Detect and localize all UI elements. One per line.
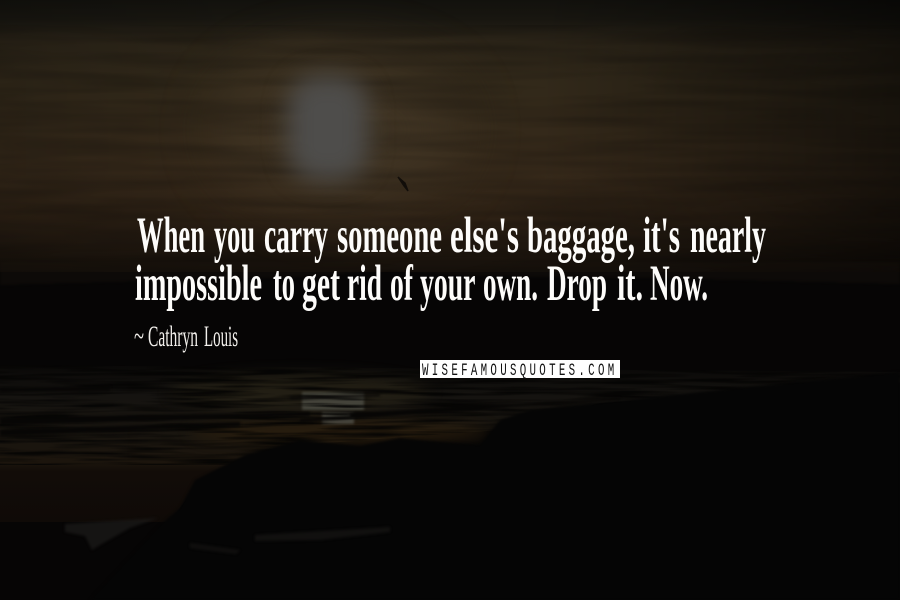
- quote line 1: When: [137, 208, 205, 264]
- quote line 1: nearly: [690, 208, 766, 264]
- silhouette: dark headland: [90, 372, 900, 600]
- quote line 2: get: [302, 256, 340, 312]
- quote text: [135, 208, 766, 312]
- quote line 2: rid: [347, 256, 382, 312]
- quote line 2: impossible: [135, 256, 262, 312]
- quote line 2: Drop: [547, 256, 607, 312]
- shoreline grey patches: [65, 518, 390, 554]
- sun glow: [288, 76, 368, 180]
- quote line 1: you: [214, 208, 255, 264]
- quote line 2: Now.: [650, 256, 708, 312]
- water ripples: [0, 370, 782, 465]
- author attribution: Cathryn: [148, 320, 198, 353]
- quote line 1: carry: [264, 208, 328, 264]
- quote line 2: your: [420, 256, 475, 312]
- quote line 2: to: [273, 256, 295, 312]
- background: sunset sky: [0, 0, 900, 280]
- sun reflection on water: [302, 392, 364, 424]
- quote line 2: own.: [483, 256, 538, 312]
- text: Louis: [204, 320, 238, 353]
- icon: bird silhouette: [398, 177, 408, 191]
- quote line 1: baggage,: [527, 208, 635, 264]
- quote line 2: it.: [617, 256, 643, 312]
- author attribution: ~: [134, 320, 144, 353]
- background: dark horizon and water: [0, 262, 900, 600]
- watermark logo: WISEFAMOUSQUOTES.COM: [422, 362, 617, 381]
- quote line 2: of: [390, 256, 414, 312]
- quote line 1: someone: [337, 208, 442, 264]
- quote line 1: it's: [643, 208, 680, 264]
- quote line 1: else's: [450, 208, 519, 264]
